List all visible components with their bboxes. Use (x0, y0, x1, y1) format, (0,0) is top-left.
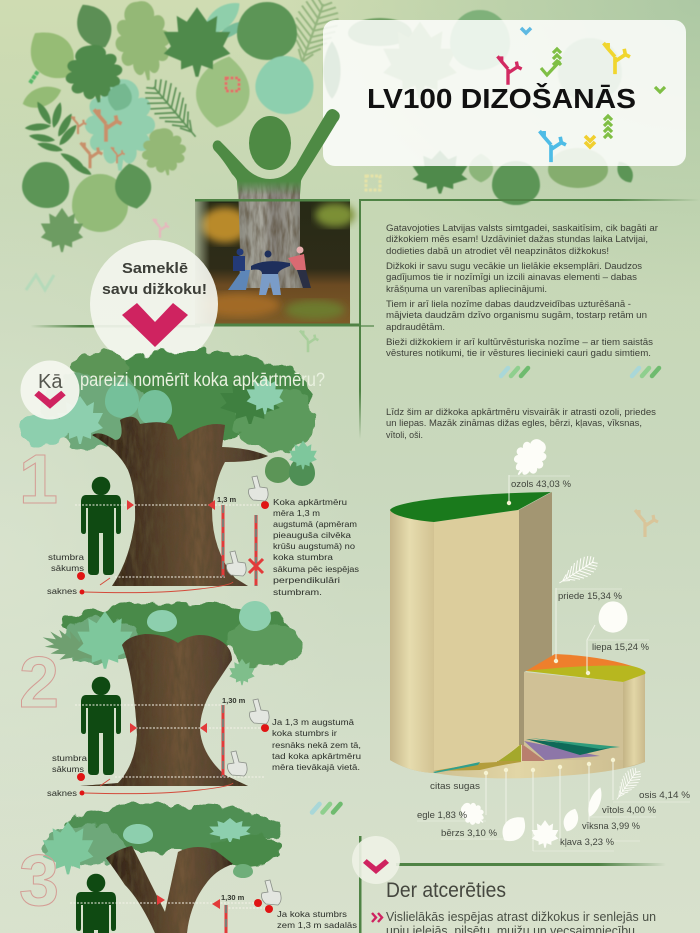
intro text: vēstures notikumi, tie ir vēstures liecinieki cauri gadu simtiem. (386, 348, 651, 358)
tree 3 crown (43, 804, 280, 878)
step 3 text (277, 909, 357, 930)
intro text (386, 223, 658, 358)
chart labels: vīksna 3,99 % (582, 821, 641, 832)
step number 1: 1 (19, 440, 58, 518)
tree 1 illustration (21, 351, 317, 586)
callout text: Sameklē (122, 260, 188, 277)
heading badge: how (20, 360, 80, 420)
step 2 text: koka stumbrs ir (272, 728, 337, 738)
step 1 text (273, 497, 359, 597)
intro text: Tiem ir arī liela nozīme dabas daudzveidības uzturēšanā - (386, 299, 631, 309)
measurement lines step 3: 1,30 m (221, 893, 245, 902)
step 2 text: mēra tievākajā vietā. (272, 762, 360, 772)
icon: double chevron bullet (372, 913, 382, 922)
step 3 text: zem 1,3 m sadalās (277, 920, 357, 930)
logo wordmark: LV100 DIZOŠANĀS (367, 82, 636, 114)
intro text: mājvieta daudzām dzīvo organismu sugām, tostarp retām un (386, 310, 647, 320)
intro text: dižkokiem mēs esam! Uzdāviniet dažas stundas laika Latvijai, (386, 234, 648, 244)
white species leaves (456, 432, 644, 848)
chart bottom ticks (390, 745, 645, 778)
step 1 text: Koka apkārtmēru (273, 497, 347, 507)
chart labels: citas sugas (430, 781, 480, 792)
callout text: savu dižkoku! (102, 281, 207, 298)
small glyph (300, 331, 318, 352)
callout circle: find your great tree (90, 240, 218, 368)
chart intro text: Līdz šim ar dižkoka apkārtmēru visvairāk ir atrasti ozoli, priedes (386, 407, 657, 417)
chart leader dots (484, 501, 615, 775)
tree 1 crown (21, 351, 317, 486)
step 1 text: mēra 1,3 m (273, 508, 320, 518)
step 1 labels: saknes (47, 586, 77, 596)
step 2 labels: saknes (47, 788, 77, 798)
person figure 1 (81, 477, 121, 575)
chart labels (417, 479, 691, 848)
tree 3 illustration (43, 804, 280, 933)
intro text: Bieži dižkokiem ir arī kultūrvēsturiska nozīme – ar tiem saistās (386, 337, 654, 347)
remember text: Vislielākās iespējas atrast dižkokus ir senlejās un (386, 910, 656, 924)
step 1 text: augstumā (apmēram (273, 519, 357, 529)
chart labels: osis 4,14 % (639, 790, 691, 801)
step 1 labels (47, 552, 84, 596)
chart intro text: vītoli, oši. (386, 430, 423, 440)
step 1 labels: stumbra (48, 552, 84, 562)
hero figure with tree trunk (190, 109, 360, 326)
callout text (102, 260, 207, 298)
step 1 text: perpendikulāri (273, 575, 340, 585)
badge with chevron (352, 836, 400, 884)
chart labels: vītols 4,00 % (602, 805, 657, 816)
step 2 labels (47, 753, 87, 798)
photo of children hugging the tree (190, 180, 360, 326)
top leaf cluster (19, 0, 344, 290)
measurement lines step 1: 1,3 m (217, 495, 237, 504)
intro text: dodieties dabā un atrodiet vēl neapzinātos dižkokus! (386, 246, 609, 256)
intro text: apdraudētām. (386, 322, 445, 332)
step 2 labels: stumbra (52, 753, 87, 763)
measurement lines step 3 (70, 880, 281, 933)
tree 2 crown (37, 601, 303, 685)
chart column: pine and linden (524, 654, 645, 768)
measurement lines step 2 (75, 696, 269, 796)
person figure 3 (76, 874, 116, 933)
intro text: Dižkoki ir savu sugu vecākie un lielākie eksemplāri. Daudzos (386, 261, 643, 271)
step number 3: 3 (19, 841, 59, 921)
step 2 text: Ja 1,3 m augstumā (272, 717, 354, 727)
panel: remember (352, 836, 666, 933)
intro text: Gatavojoties Latvijas valsts simtgadei, saskaitīsim, cik bagāti ar (386, 223, 658, 233)
heading: how to measure circumference: pareizi nomērīt koka apkārtmēru? (80, 370, 325, 391)
chart labels: egle 1,83 % (417, 810, 468, 821)
step number 2: 2 (19, 643, 59, 723)
step 2 text (272, 717, 361, 772)
measurement lines step 2: 1,30 m (222, 696, 246, 705)
icon: pink chevron (122, 303, 188, 347)
step 2 text: resnāks nekā zem tā, (272, 740, 361, 750)
logo card (323, 20, 686, 166)
chart leader lines (417, 475, 690, 851)
chart labels: kļava 3,23 % (560, 837, 615, 848)
step 2 labels: sākums (52, 764, 84, 774)
measurement lines step 1 (75, 476, 269, 594)
intro text: gadījumos tie ir nozīmīgi un izcili ainavas elementi – dabas (386, 272, 638, 282)
chart labels: ozols 43,03 % (511, 479, 572, 490)
chart column: oak (390, 492, 552, 773)
chart labels: bērzs 3,10 % (441, 828, 498, 839)
step 2 text: tad koka apkārtmēru (272, 751, 361, 761)
step 1 labels: sākums (51, 563, 84, 573)
chart intro text: un liepas. Mazāk zināmas dižas egles, bērzi, kļavas, vīksnas, (386, 418, 642, 428)
step 1 text: pieauguša cilvēka (273, 530, 351, 540)
remember text (386, 910, 656, 933)
chart labels: liepa 15,24 % (592, 642, 650, 653)
step 1 text: sākuma pēc iespējas (273, 564, 359, 574)
step 3 text: Ja koka stumbrs (277, 909, 347, 919)
chart labels: priede 15,34 % (558, 591, 623, 602)
tree 3 twin trunks (106, 846, 233, 933)
step 1 text: stumbram. (273, 587, 322, 597)
chart: species share (390, 432, 691, 851)
leaves behind logo card (348, 10, 637, 205)
person figure 2 (81, 677, 121, 775)
icon: person with raised arms (213, 109, 340, 195)
tree 1 trunk (92, 417, 268, 586)
vertical and horizontal divider lines (30, 199, 700, 439)
tree 2 illustration (37, 601, 303, 786)
decorative stripes (312, 368, 659, 812)
small glyph: tan tree (635, 510, 658, 537)
chart wedges: small species (433, 738, 620, 773)
tree 2 trunk (80, 634, 248, 786)
intro text: krāšņuma un varenības apliecinājumi. (386, 284, 547, 294)
heading badge: how: Kā (38, 371, 63, 393)
remember heading: Der atcerēties (386, 879, 506, 902)
step 1 text: krūšu augstumā) no (273, 541, 355, 551)
step 1 text: koka stumbra (273, 552, 333, 562)
chart intro text (386, 407, 657, 440)
